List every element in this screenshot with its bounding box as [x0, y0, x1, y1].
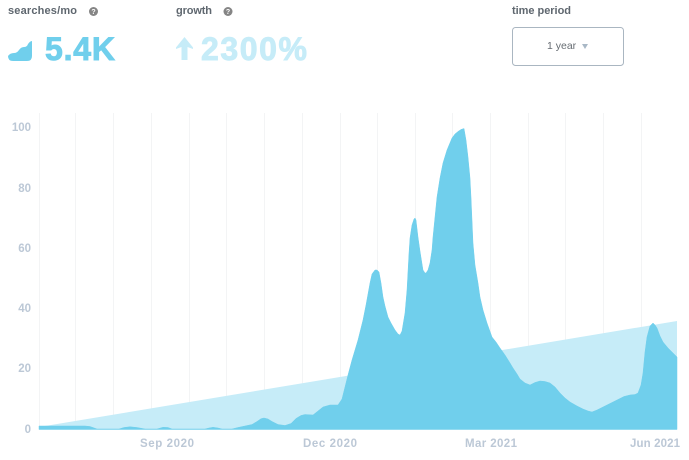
control: time period selector: [512, 5, 624, 66]
x-axis labels: Sep 2020: [140, 438, 194, 450]
y-axis labels: 40: [18, 303, 31, 315]
search volume area: [39, 128, 677, 430]
y-axis labels: [12, 122, 31, 436]
label: searches/mo: searches/mo: [8, 5, 77, 17]
value: 2300%: 2300%: [201, 31, 307, 67]
x-axis labels: [140, 438, 681, 450]
y-axis labels: 80: [18, 183, 31, 195]
icon: help for growth: ?: [226, 9, 230, 16]
value: 5.4K: 5.4K: [45, 31, 115, 67]
y-axis labels: 0: [25, 424, 31, 436]
dropdown box: [512, 28, 624, 66]
x-axis labels: Jun 2021: [630, 438, 681, 450]
icon: dropdown caret: [582, 44, 588, 49]
chart: search volume area chart: [12, 113, 681, 450]
y-axis labels: 100: [12, 122, 31, 134]
icon: help for searches: ?: [91, 9, 96, 16]
y-axis labels: 60: [18, 243, 31, 255]
x-axis labels: Mar 2021: [465, 438, 518, 450]
label: growth: growth: [176, 5, 212, 17]
metric: searches per month: [8, 5, 115, 67]
label: time period: time period: [512, 5, 571, 17]
trend area: [39, 321, 677, 430]
icon: up arrow: [176, 37, 193, 60]
dropdown value: 1 year: 1 year: [547, 40, 577, 52]
metric: growth: [176, 5, 307, 67]
y-axis labels: 20: [18, 363, 31, 375]
icon: area chart glyph: [8, 41, 32, 61]
x-axis labels: Dec 2020: [303, 438, 357, 450]
